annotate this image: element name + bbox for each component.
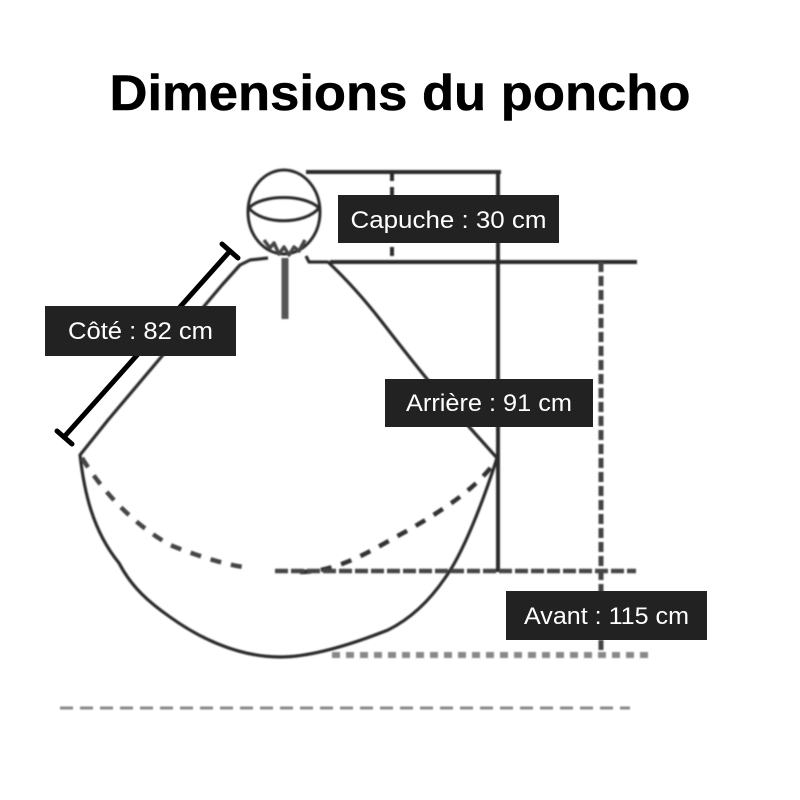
front hem dotted level bbox=[332, 652, 648, 658]
side measure line bbox=[57, 244, 238, 444]
back length line bbox=[496, 172, 500, 572]
label: Côté bbox=[45, 306, 236, 356]
icon: hood bbox=[248, 170, 320, 255]
poncho outline bbox=[80, 256, 497, 657]
hood height measure lines bbox=[306, 170, 501, 174]
front length dashed line bbox=[598, 262, 604, 655]
label: Avant: Avant : 115 cm bbox=[524, 603, 689, 630]
label: Capuche bbox=[338, 195, 559, 243]
title: Dimensions du poncho bbox=[110, 65, 690, 121]
label: Côté: Côté : 82 cm bbox=[68, 318, 213, 345]
label: Capuche: Capuche : 30 cm bbox=[350, 207, 546, 234]
hidden back hem, dashed bbox=[82, 458, 250, 568]
poncho diagram bbox=[60, 170, 648, 708]
ground dashed line bbox=[60, 706, 630, 710]
label: Arrière: Arrière : 91 cm bbox=[406, 390, 572, 417]
label: Avant bbox=[506, 591, 707, 640]
back hem dashed level bbox=[275, 569, 636, 573]
label: Arrière bbox=[385, 379, 593, 427]
icon: zipper bbox=[282, 258, 288, 319]
